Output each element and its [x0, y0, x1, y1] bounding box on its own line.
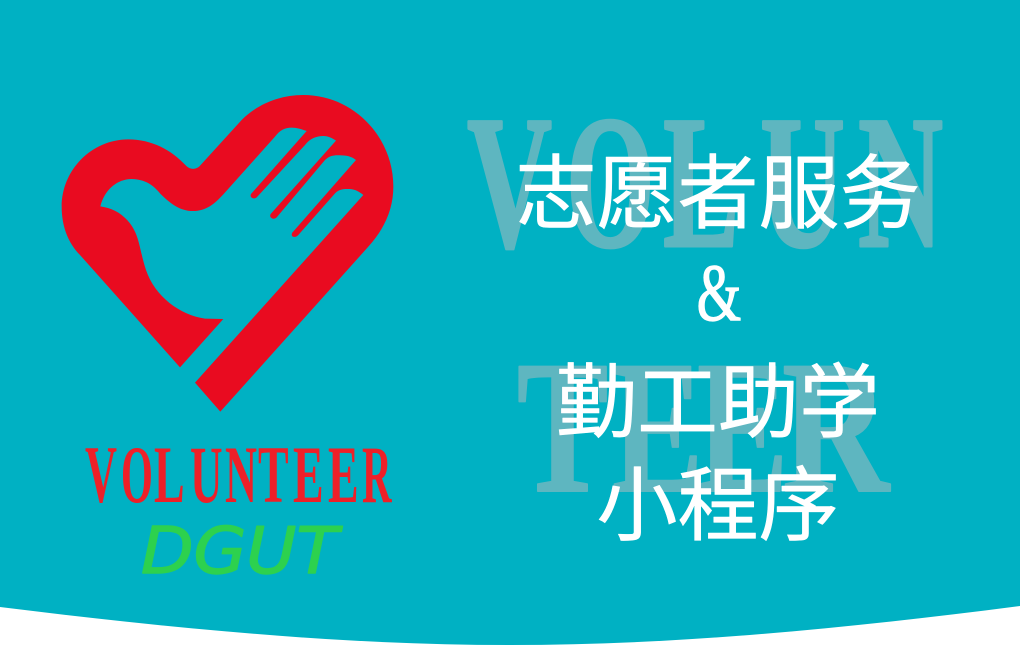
watermark: VOLUN: L [663, 76, 739, 287]
heading: mini program: 小程序 [596, 462, 840, 552]
logo wordmark: VOLUNTEER: V [85, 430, 117, 521]
logo wordmark: VOLUNTEER: O [121, 430, 153, 521]
heading: work-study: 勤工助学 [556, 359, 880, 449]
watermark: VOLUN: V [467, 78, 552, 288]
watermark: TEER: E [697, 321, 788, 532]
logo wordmark: VOLUNTEER: N [225, 430, 257, 521]
logo wordmark: VOLUNTEER: L [154, 430, 185, 521]
heading: volunteer service: 志愿者服务 [515, 150, 921, 240]
watermark: TEER [517, 321, 891, 532]
logo wordmark: VOLUNTEER [85, 430, 392, 521]
logo wordmark: VOLUNTEER: R [362, 430, 392, 521]
logo wordmark: VOLUNTEER: T [258, 430, 289, 521]
watermark: VOLUN [467, 76, 943, 288]
watermark: TEER: R [782, 322, 891, 532]
icon: red heart logo with dove and hand [62, 95, 393, 412]
watermark: VOLUN: N [858, 78, 943, 288]
watermark: VOLUN: O [566, 76, 655, 287]
logo wordmark: DGUT: DGUT [141, 515, 343, 589]
logo wordmark: VOLUNTEER: U [190, 430, 223, 521]
watermark: VOLUN: U [760, 78, 845, 288]
logo wordmark: VOLUNTEER: E [328, 430, 359, 521]
ampersand: & [697, 248, 741, 339]
watermark: TEER: T [517, 321, 608, 532]
logo wordmark: VOLUNTEER: E [293, 430, 324, 521]
watermark: TEER: E [612, 321, 703, 532]
